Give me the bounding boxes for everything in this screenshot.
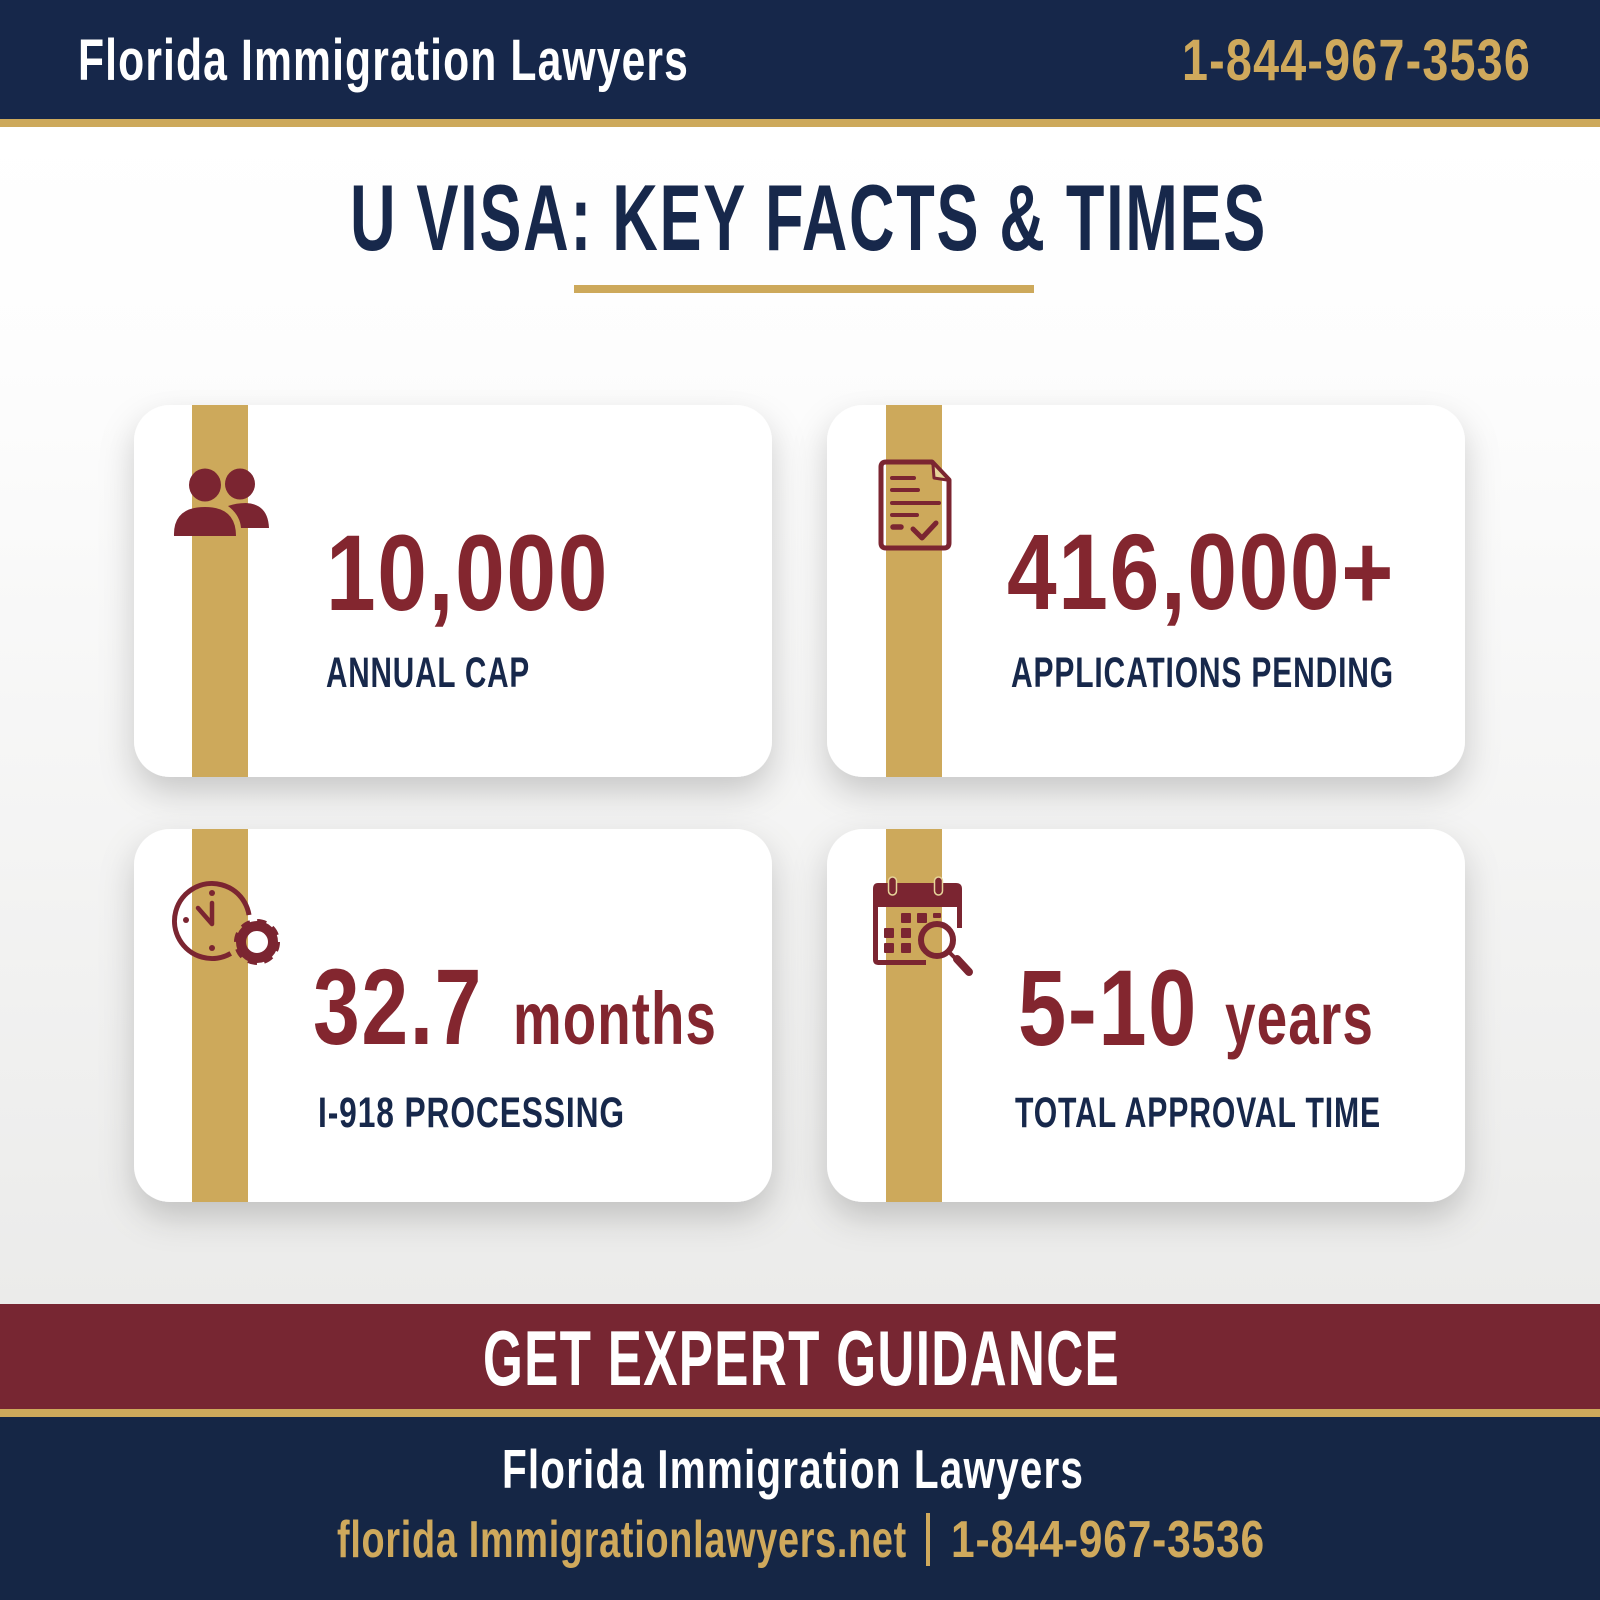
call to action band [0,1304,1600,1417]
icon: calendar with magnifier [873,877,969,972]
title underline [574,285,1034,293]
icon: document with check [881,462,949,548]
call to action text: GET EXPERT GUIDANCE [483,1314,1120,1402]
header firm name: Florida Immigration Lawyers [78,28,689,93]
footer separator [926,1513,930,1566]
page background [0,127,1600,1304]
stat: 32.7 months: months [513,977,717,1060]
footer [0,1417,1600,1600]
stat: 32.7 months [313,946,717,1067]
stat: 5-10 years: years [1225,977,1374,1060]
icon: people [174,468,269,536]
label: annual cap: ANNUAL CAP [326,649,530,697]
label: total approval time: TOTAL APPROVAL TIME [1015,1089,1381,1137]
header bar [0,0,1600,127]
footer firm name: Florida Immigration Lawyers [502,1438,1084,1500]
stat: 5-10 years: 5-10 [1018,947,1198,1068]
panel: applications pending [827,405,1465,777]
stat: 416,000+: 416,000+ [1007,511,1395,632]
footer phone number: 1-844-967-3536 [951,1511,1265,1569]
stat: 5-10 years [1018,947,1374,1068]
footer website: florida Immigrationlawyers.net [337,1511,907,1569]
panel: total approval time [827,829,1465,1202]
stat: 32.7 months: 32.7 [313,946,483,1067]
panel: I-918 processing [134,829,772,1202]
icon: clock with gear [161,870,278,972]
panel: annual cap [134,405,772,777]
stat: 10,000: 10,000 [326,512,609,633]
label: I-918 processing: I-918 PROCESSING [318,1089,625,1137]
label: applications pending: APPLICATIONS PENDING [1011,649,1394,697]
